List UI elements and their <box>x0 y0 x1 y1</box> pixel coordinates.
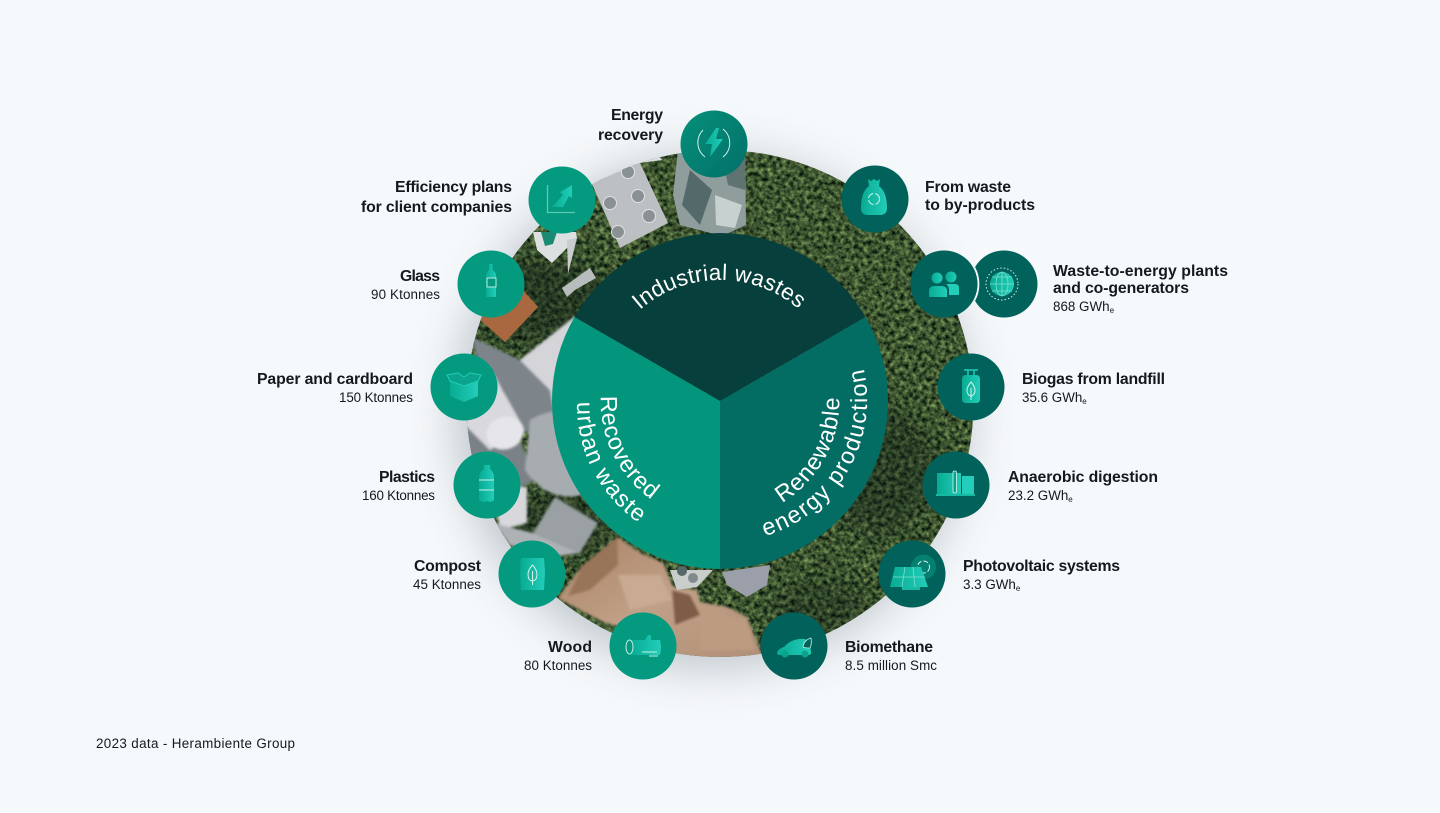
item: waste-to-energy plants: Waste-to-energy plants <box>1053 263 1228 280</box>
pie slice: renewable energy production <box>720 317 888 569</box>
item: energy recovery <box>598 107 748 178</box>
item: from waste to by-products: From waste <box>925 179 1011 196</box>
icon: digester tanks <box>936 471 975 496</box>
item: waste-to-energy plants <box>970 250 1228 318</box>
icon: car with leaf <box>777 638 811 658</box>
item: biogas from landfill: Biogas from landfill <box>1022 371 1165 388</box>
item: efficiency plans: Efficiency plans <box>395 179 512 196</box>
item: wood <box>524 612 676 680</box>
item: compost: Compost <box>414 558 482 575</box>
item: glass <box>371 250 524 318</box>
item: photovoltaic systems <box>878 540 1120 608</box>
item: biogas from landfill: e <box>1082 397 1087 406</box>
item: biomethane <box>760 612 937 680</box>
clear bottle <box>673 150 746 236</box>
source note: 2023 data - Herambiente Group <box>96 736 295 751</box>
white wrapper <box>533 232 577 263</box>
pie label: recovered urban waste: urban waste <box>576 403 644 521</box>
item: biogas from landfill <box>938 354 1165 420</box>
item: biogas from landfill: 35.6 GWh <box>1022 390 1082 405</box>
pie label: renewable energy production: energy production <box>763 370 868 535</box>
item: energy recovery: Energy <box>611 107 663 124</box>
item: photovoltaic systems: 3.3 GWh <box>963 577 1016 592</box>
item: paper and cardboard: Paper and cardboard <box>257 371 413 388</box>
grey plastics <box>460 316 600 558</box>
item: wood: Wood <box>548 639 592 656</box>
item: efficiency plans: for client companies <box>361 199 512 216</box>
item: energy recovery: recovery <box>598 127 663 144</box>
item: compost <box>413 540 566 608</box>
icon: log <box>626 635 661 656</box>
item: efficiency plans <box>361 166 596 234</box>
item: paper and cardboard: 150 Ktonnes <box>339 390 413 405</box>
icon: globe <box>986 268 1018 300</box>
crumpled plastic bag <box>722 565 770 597</box>
item: anaerobic digestion: Anaerobic digestion <box>1008 469 1158 486</box>
icon: people <box>929 272 959 297</box>
item: compost: 45 Ktonnes <box>413 577 481 592</box>
blister pack <box>592 163 668 248</box>
icon: bottle <box>486 264 496 297</box>
icon: compost bag with leaf <box>520 558 545 590</box>
item: biomethane: 8.5 million Smc <box>845 658 937 673</box>
item: waste-to-energy plants: e <box>1110 306 1115 315</box>
icon: open box <box>447 373 481 402</box>
pie slice: recovered urban waste <box>552 317 720 569</box>
icon: growth chart <box>548 185 575 212</box>
item: plastics: Plastics <box>379 469 435 486</box>
icon: plastic bottle <box>479 465 494 502</box>
item: wood: 80 Ktonnes <box>524 658 592 673</box>
item: from waste to by-products: to by-products <box>925 197 1035 214</box>
item: glass: Glass <box>400 268 440 285</box>
small blister <box>670 570 713 590</box>
icon: lightning with arrows <box>698 128 730 157</box>
item: people circle <box>910 250 978 318</box>
item: photovoltaic systems: e <box>1016 584 1021 593</box>
pie slice: industrial wastes <box>574 233 866 401</box>
pie label: renewable energy production: Renewable <box>774 398 840 502</box>
item: waste-to-energy plants: and co-generators <box>1053 280 1189 297</box>
icon: gas cylinder <box>962 370 980 403</box>
pie label: recovered urban waste: Recovered <box>600 398 660 499</box>
item: from waste to by-products <box>842 166 1035 232</box>
item: anaerobic digestion: 23.2 GWh <box>1008 488 1068 503</box>
item: anaerobic digestion <box>922 452 1158 518</box>
icon: waste bag <box>861 179 887 215</box>
item: photovoltaic systems: Photovoltaic systems <box>963 558 1120 575</box>
item: plastics <box>362 452 520 518</box>
icon: solar panel <box>890 554 936 590</box>
item: glass: 90 Ktonnes <box>371 287 440 302</box>
item: anaerobic digestion: e <box>1068 495 1073 504</box>
item: paper and cardboard <box>257 354 498 420</box>
kraft paper <box>558 537 764 660</box>
item: plastics: 160 Ktonnes <box>362 488 435 503</box>
item: biomethane: Biomethane <box>845 639 933 656</box>
disc shadow <box>456 156 968 668</box>
cardboard box <box>478 290 538 342</box>
photo disc: waste and grass <box>460 140 980 670</box>
item: waste-to-energy plants: 868 GWh <box>1053 299 1110 314</box>
pie chart <box>552 233 888 569</box>
pie label: industrial wastes: Industrial wastes <box>632 264 804 309</box>
